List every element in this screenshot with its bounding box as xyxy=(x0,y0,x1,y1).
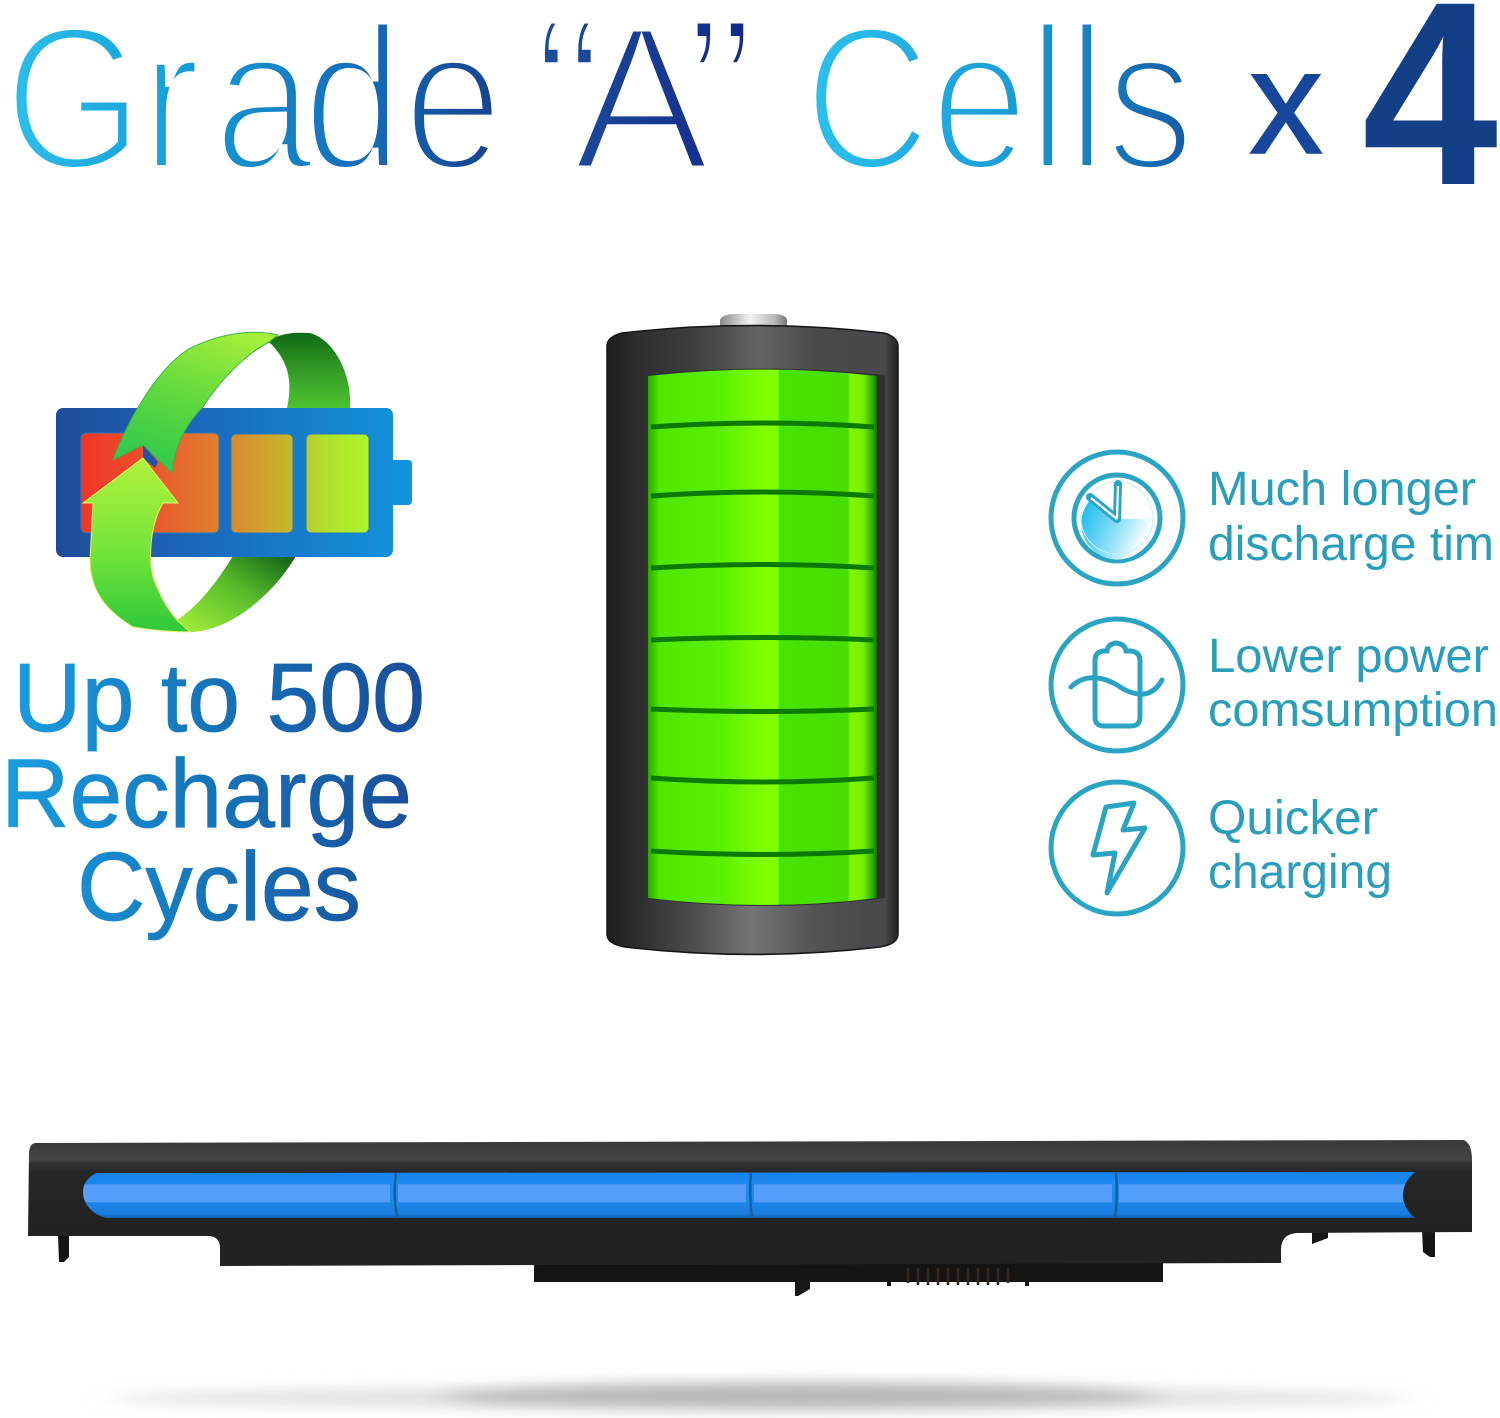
panel: laptop battery pack xyxy=(28,1140,1472,1410)
title xyxy=(4,0,1500,240)
pack lower tab xyxy=(795,1280,810,1296)
charge segment dividers xyxy=(651,423,874,854)
benefit: lower power consumption xyxy=(1051,619,1498,751)
arrow front band bottom with head xyxy=(83,458,190,632)
text: lower power consumption xyxy=(1208,630,1498,737)
icon: battery with recycling arrow xyxy=(56,332,412,632)
pack body xyxy=(28,1140,1472,1266)
cell dividers xyxy=(395,1173,1117,1218)
text: lower power consumption: Lower power xyxy=(1208,630,1489,683)
arrow front band top xyxy=(113,332,278,473)
caption: up to 500 recharge cycles: Up to 500 xyxy=(13,643,425,752)
cylinder bottom band xyxy=(608,893,897,954)
caption: up to 500 recharge cycles: Recharge xyxy=(1,739,412,848)
text: quicker charging: charging xyxy=(1208,846,1392,899)
benefit: longer discharge time xyxy=(1051,452,1494,584)
text: quicker charging xyxy=(1208,792,1392,899)
title multiplier: x: x xyxy=(1249,20,1323,185)
ground shadow xyxy=(110,1382,1410,1410)
green charge xyxy=(648,370,877,905)
panel: recharge cycles xyxy=(1,332,425,941)
benefit: quicker charging xyxy=(1051,782,1392,914)
pack lower block xyxy=(534,1262,1163,1282)
pack left pin xyxy=(58,1234,69,1262)
caption: up to 500 recharge cycles xyxy=(1,643,425,941)
text: much longer discharge time: discharge tim xyxy=(1208,518,1494,571)
battery cells xyxy=(81,433,369,533)
cell divider gaps xyxy=(390,1183,1119,1203)
icon: clock xyxy=(1051,452,1183,584)
battery window xyxy=(642,368,885,906)
battery cylinder xyxy=(607,326,898,954)
text: quicker charging: Quicker xyxy=(1208,792,1378,845)
battery terminal xyxy=(393,460,412,505)
arrow notch blue sliver xyxy=(143,445,158,468)
battery body xyxy=(56,408,393,557)
pack right small tab xyxy=(1312,1231,1328,1244)
icon: battery with wave xyxy=(1051,619,1183,751)
cylinder top band xyxy=(608,326,897,385)
battery top terminal xyxy=(720,314,787,327)
panel: central green battery xyxy=(607,314,898,954)
icon: lightning bolt xyxy=(1051,782,1183,914)
caption: up to 500 recharge cycles: Cycles xyxy=(77,832,361,941)
text: much longer discharge time: Much longer xyxy=(1208,463,1476,516)
pack right pin xyxy=(1422,1230,1435,1257)
blue cell band xyxy=(83,1172,1415,1218)
panel: benefits list xyxy=(1051,452,1498,914)
arrow back band bottom xyxy=(177,556,296,632)
text: much longer discharge time xyxy=(1208,463,1494,571)
arrow back band top xyxy=(269,333,350,408)
pack connector contacts xyxy=(889,1268,1027,1286)
text: lower power consumption: comsumption xyxy=(1208,684,1498,737)
